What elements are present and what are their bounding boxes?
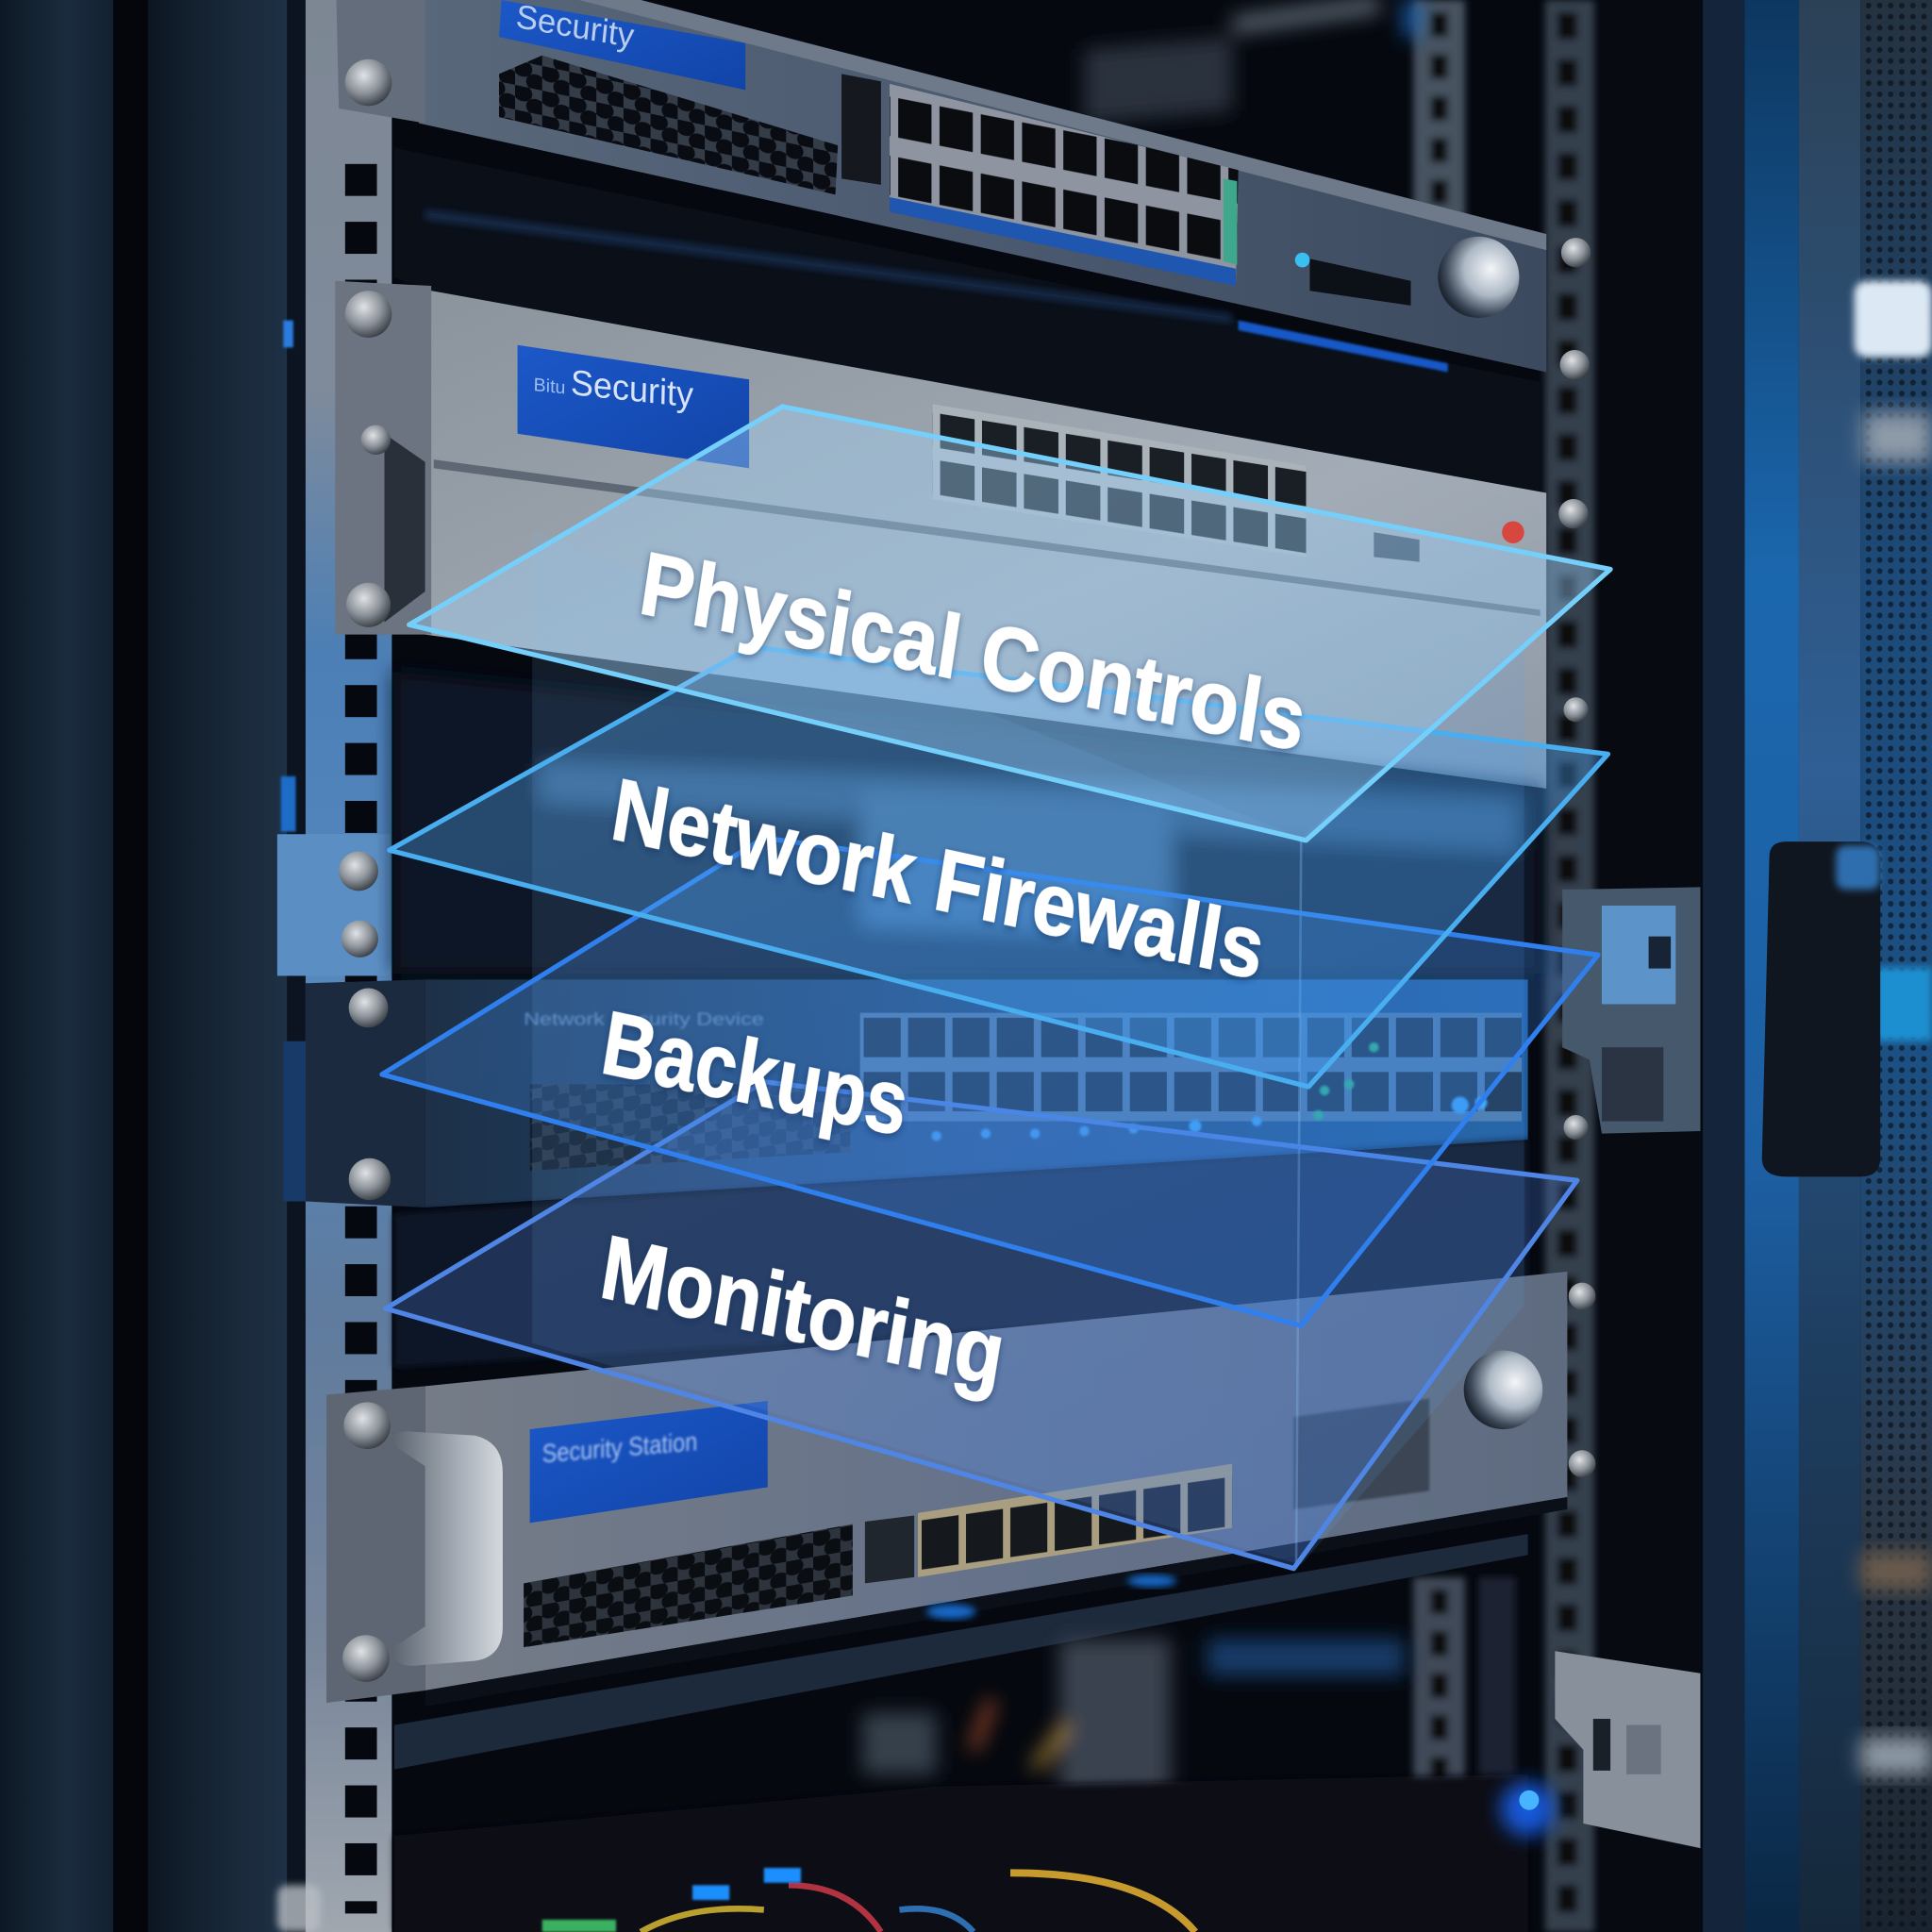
appliance label word: Security (571, 361, 694, 415)
appliance small ports (1374, 532, 1420, 562)
layer 2: network firewalls (390, 647, 1607, 1087)
dark shelf under switch (394, 148, 1541, 492)
appliance mounting ear (335, 281, 431, 635)
silver honeycomb vent (524, 1524, 853, 1647)
silver mounting ear (326, 1386, 425, 1703)
switch ethernet ports (890, 84, 1239, 283)
server unit 1: top switch (337, 0, 1591, 379)
appliance screws (345, 291, 1589, 627)
blurred gap under dark switch (394, 1140, 1528, 1368)
under-switch blue light line (1239, 321, 1448, 372)
switch console ports (1309, 258, 1411, 306)
silver ethernet ports (918, 1464, 1232, 1577)
lower shelf rails (394, 1497, 1567, 1770)
switch power LED (1295, 253, 1309, 267)
switch port legend strip (890, 197, 1236, 286)
right rack posts (1413, 0, 1594, 1932)
dark switch mounting ear (306, 979, 425, 1208)
left mounting rail with square holes (277, 0, 391, 1932)
silver right ports (1293, 1398, 1429, 1509)
dark switch honeycomb vent (530, 1084, 850, 1171)
server unit 2: security appliance (335, 281, 1589, 789)
switch small ports (841, 74, 881, 185)
switch honeycomb vent (499, 56, 838, 194)
backups glass sheet (382, 838, 1598, 1325)
dark switch screws (339, 697, 1589, 1200)
silver module (865, 1516, 914, 1583)
appliance label text: Bitu (533, 375, 566, 398)
switch knob (1438, 237, 1519, 318)
appliance red LED (1502, 521, 1524, 543)
switch display label (499, 0, 745, 90)
bottom equipment and cables (394, 1774, 1528, 1932)
switch mounting ear (337, 0, 425, 124)
translucent box behind layers (532, 530, 1524, 1565)
physical controls glass sheet (409, 407, 1610, 841)
blue status LED (1501, 1782, 1555, 1836)
switch faceplate (419, 0, 1546, 372)
backups label: Backups (596, 991, 915, 1155)
dark switch caption: Network Security Device (524, 1009, 764, 1029)
dark switch ports (860, 1013, 1522, 1122)
blurred background below shelf (862, 1639, 1405, 1799)
right cabinet door with blue glow (1602, 0, 1932, 1932)
door hinge upper (1562, 887, 1700, 1134)
appliance crease (434, 459, 1541, 616)
switch status LEDs (1224, 178, 1237, 265)
door handle (1762, 841, 1880, 1176)
switch screws (345, 59, 1591, 379)
appliance faceplate (425, 290, 1546, 789)
appliance ear handle (385, 434, 425, 623)
silver screws (342, 1283, 1595, 1682)
door hinge lower (1555, 1651, 1700, 1848)
left cabinet frame (0, 0, 306, 1932)
monitoring label: Monitoring (594, 1217, 1011, 1407)
silver knob (1464, 1351, 1542, 1429)
dark switch blue LEDs (931, 1096, 1487, 1141)
switch top edge (579, 0, 1546, 250)
dim blurred gap equipment (394, 672, 1541, 974)
firewalls glass sheet (390, 647, 1607, 1087)
physical controls label: Physical Controls (634, 533, 1312, 771)
appliance display label (518, 345, 749, 468)
silver handle (391, 1431, 503, 1666)
layer 3: backups (382, 838, 1598, 1325)
monitoring glass sheet (386, 1082, 1577, 1569)
appliance ethernet ports (933, 404, 1306, 557)
dark switch faceplate (425, 979, 1528, 1208)
upper dark background equipment (1084, 0, 1420, 124)
dark switch green LEDs (1313, 1042, 1379, 1120)
firewalls label: Network Firewalls (606, 759, 1271, 998)
silver display label (530, 1401, 768, 1523)
server unit 4: silver appliance (326, 1272, 1595, 1703)
layer 1: physical controls (409, 407, 1610, 841)
silver label text: Security Station (542, 1426, 697, 1468)
silver faceplate (425, 1272, 1567, 1690)
server unit 3: dark blue switch (306, 697, 1589, 1208)
layer 4: monitoring (386, 1082, 1577, 1569)
